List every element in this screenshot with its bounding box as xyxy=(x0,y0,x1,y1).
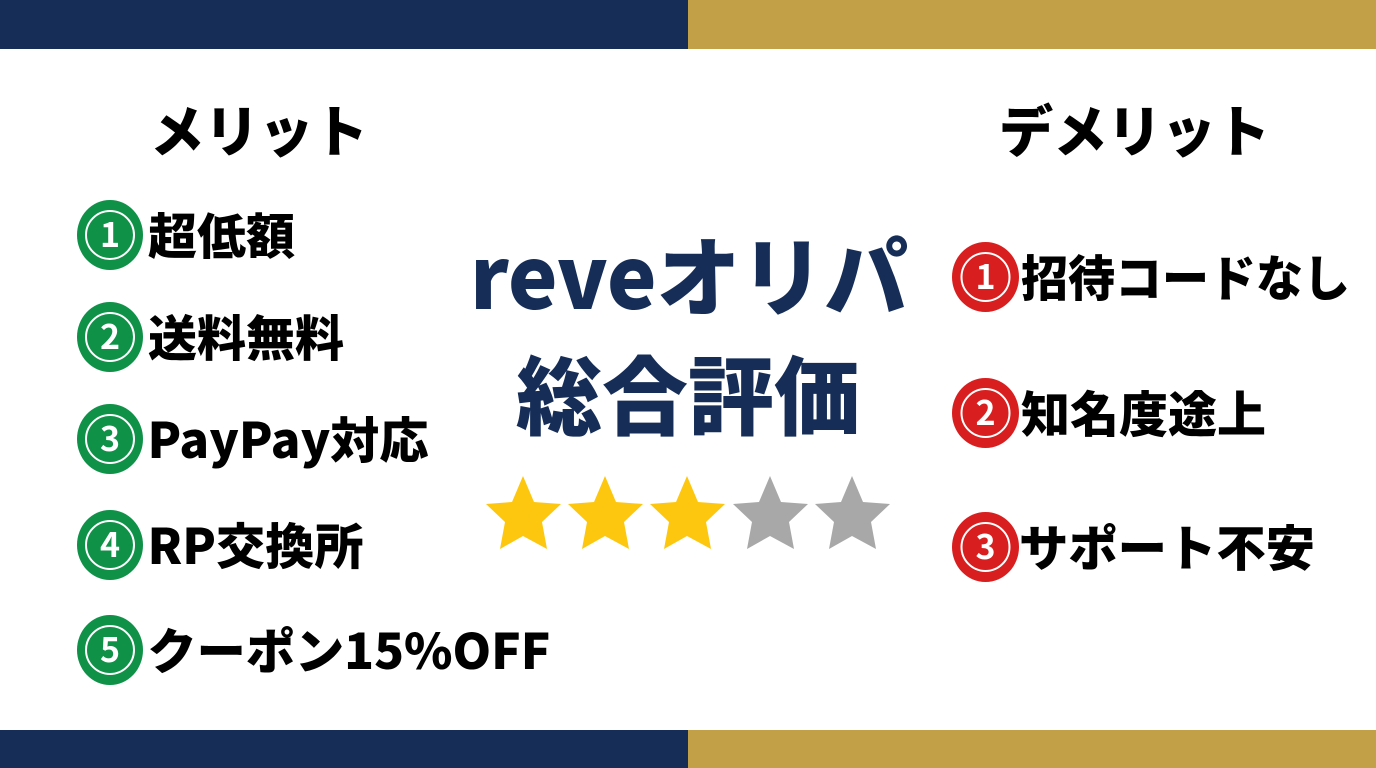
merit 1: 超低額 xyxy=(148,198,295,269)
merit 3: 3 xyxy=(100,412,120,461)
merit 4: RP交換所 xyxy=(148,508,364,579)
heading: merit: メリット xyxy=(150,88,368,169)
merit 4: 4 xyxy=(100,518,120,567)
star 3 xyxy=(650,476,725,549)
star 5 xyxy=(815,476,890,549)
merit 5: 5 xyxy=(100,623,120,672)
center title line 2: 総合評価 xyxy=(516,328,860,453)
star 1 xyxy=(486,476,561,549)
demerit 3: 3 xyxy=(975,520,996,569)
merit 2: 2 xyxy=(100,310,120,359)
star rating xyxy=(486,476,890,549)
bottom banner xyxy=(0,730,1376,768)
star 4 xyxy=(733,476,808,549)
top banner xyxy=(0,0,1376,49)
merit 2: 送料無料 xyxy=(148,300,344,371)
demerit 1: 1 xyxy=(975,250,996,299)
demerit 3: サポート不安 xyxy=(1019,510,1315,581)
merit 1: 1 xyxy=(100,208,120,257)
merit 1 xyxy=(77,198,295,270)
center title line 1: reveオリパ xyxy=(470,209,908,334)
demerit 1: 招待コードなし xyxy=(1021,240,1350,311)
heading: demerit: デメリット xyxy=(999,88,1270,169)
merit 3: PayPay対応 xyxy=(148,402,428,473)
merit 5: クーポン15%OFF xyxy=(148,613,550,684)
demerit 2: 知名度途上 xyxy=(1021,376,1266,447)
demerit list xyxy=(952,240,1350,582)
star 2 xyxy=(568,476,643,549)
demerit 2: 2 xyxy=(975,386,996,435)
merit list xyxy=(77,198,550,685)
